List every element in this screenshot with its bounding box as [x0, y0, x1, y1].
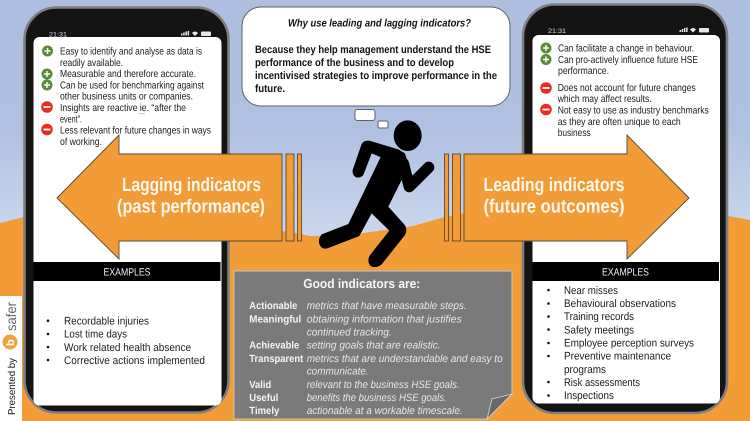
indicator: meaningful: obtaining information that justifies — [307, 314, 462, 326]
text: easy to identify: Easy to identify and analyse as data is — [60, 46, 202, 58]
status bar time: 21:31 — [548, 28, 566, 35]
pros and cons list — [41, 46, 211, 148]
bsafer logo — [2, 302, 19, 350]
status bar icons — [181, 31, 211, 36]
indicator: valid: Valid — [249, 380, 271, 391]
indicator: achievable — [249, 340, 441, 352]
text: does not account: which may affect results. — [557, 94, 652, 105]
orange hill — [0, 204, 750, 421]
text: measurable: Measurable and therefore accurate. — [60, 69, 196, 80]
indicator: meaningful: continued tracking. — [307, 326, 392, 338]
text: insights: event”. — [60, 114, 82, 125]
examples list: programs — [564, 364, 606, 376]
examples list: Behavioural observations — [564, 298, 676, 310]
indicator: valid: relevant to the business HSE goals. — [307, 379, 460, 391]
panel: lagging phone — [24, 8, 228, 412]
examples list: Preventive maintenance — [564, 351, 671, 363]
text: less relevant: of working. — [60, 137, 102, 148]
text: less relevant: Less relevant for future changes in ways — [60, 126, 211, 136]
indicator: useful: Useful — [249, 393, 278, 404]
examples list — [547, 285, 694, 402]
indicator: transparent: communicate. — [307, 366, 369, 378]
examples header — [532, 262, 719, 281]
examples list: Employee perception surveys — [564, 338, 694, 350]
indicator: valid — [249, 379, 460, 391]
text: easy to identify — [60, 46, 202, 69]
icon: plus — [540, 54, 552, 65]
phone frame — [523, 4, 727, 413]
examples list: Near misses — [564, 285, 618, 297]
text: pro-actively — [558, 55, 698, 77]
arrow label: (future outcomes) — [484, 196, 624, 218]
text: easy to identify: readily available. — [60, 58, 123, 69]
icon: plus — [42, 46, 53, 56]
icon: minus — [41, 101, 53, 113]
panel: leading phone — [523, 4, 727, 413]
text: benchmarking: other business units or companies. — [60, 92, 193, 102]
presented by text: Presented by — [7, 358, 18, 415]
pros and cons list — [540, 42, 709, 139]
examples list: Inspections — [564, 390, 614, 402]
thought bubble — [242, 7, 510, 106]
bsafer logo: safer — [3, 302, 19, 331]
presented by logo strip — [0, 296, 22, 421]
bsafer logo: b — [5, 339, 17, 346]
status bar time: 21:31 — [49, 32, 67, 38]
icon: minus — [41, 124, 53, 135]
folded corner — [487, 394, 512, 419]
examples list: Recordable injuries — [64, 316, 149, 328]
icon: plus — [540, 42, 552, 54]
indicator: transparent: metrics that are understandable and easy to — [307, 353, 503, 365]
icon: minus — [540, 82, 552, 94]
examples list: Safety meetings — [564, 324, 634, 336]
examples header: EXAMPLES — [602, 266, 649, 278]
text: insights — [60, 103, 186, 125]
bubble body text: incentivised strategies to improve performance in the — [255, 70, 497, 82]
examples list: Work related health absence — [64, 342, 191, 354]
arrow: lagging indicators — [57, 135, 302, 259]
indicator: meaningful: Meaningful — [249, 314, 301, 326]
text: does not account: Does not account for future changes — [558, 83, 696, 94]
indicator: useful — [249, 392, 447, 404]
arrow: leading indicators — [444, 135, 689, 259]
text: benchmarking: Can be used for benchmarking against — [60, 80, 204, 91]
arrow label — [484, 175, 624, 218]
text: pro-actively: Can pro-actively influence future HSE — [558, 55, 698, 66]
text: not easy: as they are often unique to each — [558, 117, 681, 128]
icon: plus — [42, 80, 52, 90]
text: not easy: Not easy to use as industry benchmarks — [558, 106, 709, 116]
examples list: Training records — [564, 311, 634, 323]
text: facilitate: Can facilitate a change in behaviour. — [558, 44, 694, 54]
icon: running figure — [319, 120, 429, 267]
status bar icons — [680, 28, 709, 32]
examples list: Lost time days — [64, 329, 127, 341]
text: not easy: business — [558, 128, 591, 139]
indicator: useful: benefits the business HSE goals. — [307, 392, 447, 404]
text: pro-actively: performance. — [558, 66, 609, 77]
arrow label — [117, 175, 265, 218]
phone frame — [24, 8, 228, 412]
indicator: achievable: Achievable — [249, 340, 299, 352]
arrow label: (past performance) — [117, 196, 265, 218]
bubble body text: performance of the business and to develop — [255, 57, 454, 69]
examples header — [34, 262, 220, 281]
examples list: Corrective actions implemented — [64, 355, 205, 367]
indicator: meaningful — [249, 314, 462, 338]
icon: minus — [540, 104, 552, 115]
panel: good indicators — [234, 271, 512, 419]
indicator: achievable: setting goals that are realistic. — [307, 340, 441, 352]
arrow label: Leading indicators — [484, 175, 624, 196]
text: insights: Insights are reactive ie. “after the — [60, 103, 186, 114]
examples list — [47, 316, 205, 367]
indicator: actionable: metrics that have measurable steps. — [307, 300, 467, 312]
text: benchmarking — [60, 80, 204, 102]
indicator: transparent — [249, 353, 503, 378]
text: does not account — [557, 83, 696, 105]
examples list: Risk assessments — [564, 377, 640, 389]
indicator: timely: Timely — [249, 406, 279, 417]
bubble body text: future. — [255, 83, 285, 95]
bubble body text — [255, 44, 497, 95]
panel heading: Good indicators are: — [303, 276, 420, 291]
bubble heading: Why use leading and lagging indicators? — [288, 18, 471, 30]
thought bubble trail — [355, 110, 388, 128]
phone screen — [532, 35, 720, 404]
bubble body text: Because they help management understand the HSE — [255, 44, 491, 56]
indicator: timely: actionable at a workable timescale. — [307, 405, 463, 417]
phone screen — [34, 37, 222, 406]
icon: plus — [42, 68, 52, 80]
indicator: actionable: Actionable — [249, 301, 297, 312]
indicator: transparent: Transparent — [249, 354, 304, 365]
arrow label: Lagging indicators — [122, 175, 261, 196]
examples header: EXAMPLES — [104, 266, 150, 278]
text: less relevant — [60, 126, 211, 148]
text: not easy — [558, 106, 709, 139]
